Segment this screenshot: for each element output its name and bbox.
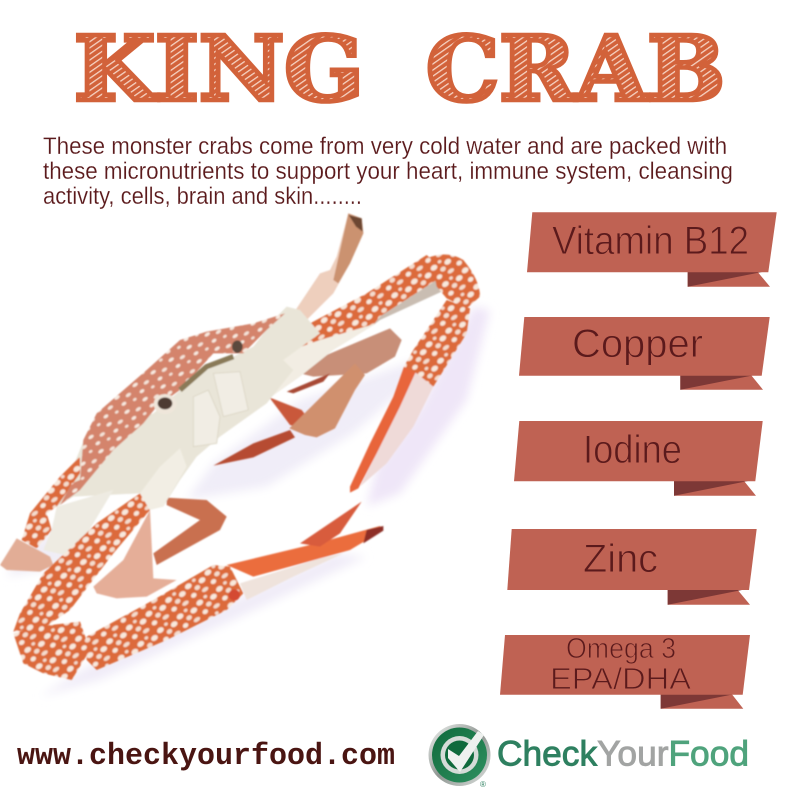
ribbon: Omega 3 EPA/DHA: Omega 3 xyxy=(566,633,676,665)
crab photo illustration xyxy=(0,213,490,697)
ribbon: Copper xyxy=(519,317,770,390)
intro text: activity, cells, brain and skin........ xyxy=(43,183,362,210)
ribbon: Iodine xyxy=(514,421,763,496)
logo wordmark: CheckYourFood xyxy=(497,734,749,774)
icon: check your food logo badge: ® xyxy=(480,780,486,789)
title: KING xyxy=(74,16,364,121)
website url: www.checkyourfood.com xyxy=(17,739,395,774)
ribbon: Omega 3 EPA/DHA xyxy=(500,633,750,709)
icon: check your food logo badge xyxy=(428,724,490,789)
ribbon: Vitamin B12 xyxy=(527,212,777,287)
ribbon: Iodine: Iodine xyxy=(583,428,682,472)
ribbon: Vitamin B12: Vitamin B12 xyxy=(552,219,749,263)
intro text xyxy=(43,133,733,210)
title: CRAB xyxy=(426,16,725,121)
ribbon: Omega 3 EPA/DHA: EPA/DHA xyxy=(550,661,691,696)
title xyxy=(74,16,725,121)
ribbon: Copper: Copper xyxy=(572,322,703,366)
intro text: these micronutrients to support your heart, immune system, cleansing xyxy=(43,158,733,185)
ribbon: Zinc xyxy=(507,529,757,605)
ribbon: Zinc: Zinc xyxy=(583,537,658,581)
intro text: These monster crabs come from very cold water and are packed with xyxy=(43,133,727,160)
